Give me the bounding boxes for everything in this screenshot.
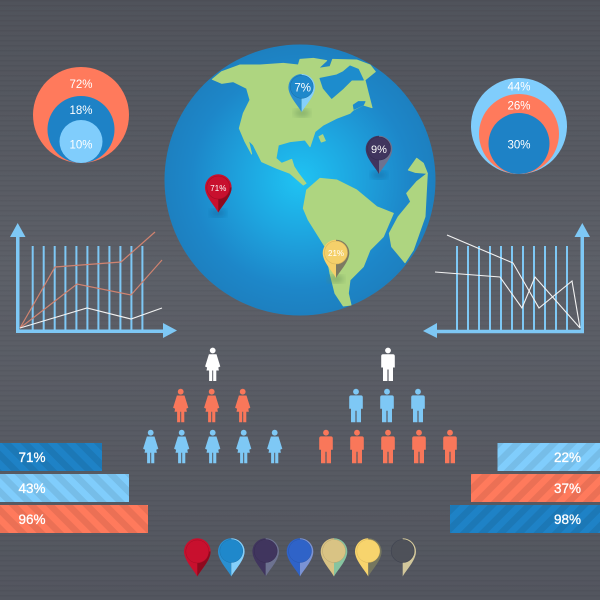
pin: 71%: [205, 174, 232, 217]
bar 37%: 37%: [554, 481, 581, 496]
pin: blue: [218, 538, 245, 576]
line chart: right: [423, 223, 590, 338]
nested circles: right: 30%: [507, 140, 531, 152]
bar 96%: 96%: [18, 512, 46, 527]
globe: [164, 44, 436, 316]
continents: [212, 58, 427, 306]
nested circles: left: 10%: [69, 140, 93, 152]
ocean: [164, 44, 436, 316]
bars: [32, 246, 143, 331]
nested circles: right: 44%: [507, 82, 531, 94]
bar 22%: 22%: [554, 450, 581, 465]
bars: right: [450, 443, 600, 533]
bar 22%: [498, 443, 600, 471]
nested circles: right: [471, 78, 567, 174]
line chart: left: [10, 223, 177, 338]
pin: outline: [391, 538, 416, 576]
bar 98%: 98%: [554, 512, 581, 527]
men row: orange: [319, 430, 457, 463]
pin: 9%: [366, 136, 392, 179]
people: women: [143, 348, 282, 463]
pin: 7%: [288, 74, 315, 117]
nested circles: left: 18%: [69, 105, 93, 117]
pin: 9%: 9%: [371, 144, 387, 156]
nested circles: left: 72%: [69, 79, 93, 91]
pin: yellow: [355, 538, 382, 576]
bar 98%: [450, 505, 600, 533]
bar 43%: [0, 474, 129, 502]
data lines: [447, 235, 580, 328]
pin: red: [184, 538, 211, 576]
pin: 21%: 21%: [328, 249, 344, 258]
pin: 7%: 7%: [294, 82, 311, 94]
bars: [456, 246, 568, 331]
bar 43%: 43%: [18, 481, 46, 496]
man: white: [381, 348, 395, 381]
people: men: [319, 348, 457, 463]
pin: tan: [321, 538, 347, 576]
nested circles: right: 26%: [507, 100, 531, 112]
woman: white: [205, 348, 220, 381]
pin: 71%: 71%: [210, 184, 226, 193]
women row: orange: [173, 389, 250, 422]
data lines: [20, 232, 155, 328]
pin: dark purple: [252, 538, 279, 576]
pin: 21%: [323, 240, 349, 283]
pin: royal blue: [287, 538, 313, 576]
bar 37%: [471, 474, 600, 502]
axis arrows: [423, 223, 590, 338]
nested circles: left: [33, 67, 129, 163]
women row: blue: [143, 430, 282, 463]
pin legend row: [184, 538, 416, 576]
bar 71%: [0, 443, 102, 471]
axes: [16, 235, 164, 333]
bar 71%: 71%: [18, 450, 46, 465]
axis arrows: [10, 223, 177, 338]
bar 96%: [0, 505, 148, 533]
axes: [437, 235, 584, 333]
bars: left: [0, 443, 148, 533]
men row: blue: [349, 389, 425, 422]
